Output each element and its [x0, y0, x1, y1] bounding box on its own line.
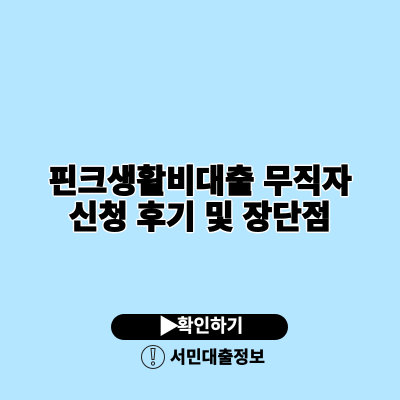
title line 1: 핀크생활비대출 무직자 — [48, 163, 352, 199]
icon: exclamation circle — [141, 345, 165, 369]
source label: 서민대출정보 — [170, 347, 265, 367]
title — [48, 162, 354, 235]
button: confirm — [111, 314, 288, 340]
button label: 확인하기 — [177, 316, 243, 336]
title line 2: 신청 후기 및 장단점 — [69, 199, 331, 235]
button arrow: ▶ — [158, 314, 180, 339]
